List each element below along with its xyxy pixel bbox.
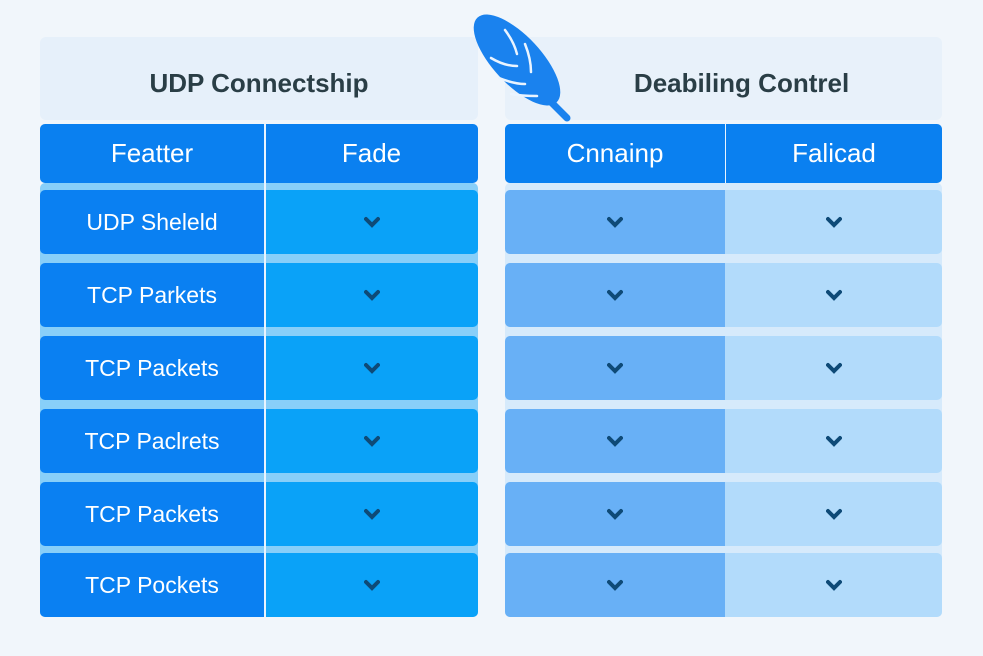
row 2 — [505, 263, 942, 327]
header row — [505, 124, 942, 183]
row 5: TCP Packets — [85, 500, 219, 526]
header row: Fade — [342, 138, 401, 168]
row 3: TCP Packets — [85, 354, 219, 380]
row 5 — [40, 482, 478, 546]
panel: right table — [505, 37, 942, 617]
title: UDP Connectship: UDP Connectship — [149, 68, 369, 98]
title: UDP Connectship — [40, 37, 478, 120]
row 2: TCP Parkets — [87, 282, 217, 308]
row 6: TCP Pockets — [85, 572, 219, 598]
divider — [264, 183, 266, 617]
row 3 — [40, 336, 478, 400]
row 4: TCP Paclrets — [84, 428, 220, 454]
row band background — [505, 183, 942, 617]
icon: feather — [474, 14, 570, 122]
title: Deabiling Contrel — [505, 37, 942, 120]
row 6 — [40, 553, 478, 617]
row 3 — [505, 336, 942, 400]
row band background — [40, 183, 478, 617]
row 1 — [505, 190, 942, 254]
panel: left table — [40, 37, 478, 617]
header row — [40, 124, 478, 183]
title: Deabiling Contrel: Deabiling Contrel — [634, 68, 849, 98]
row 2 — [40, 263, 478, 327]
header row: Featter — [111, 138, 193, 168]
row 1 — [40, 190, 478, 254]
row 1: UDP Sheleld — [86, 208, 218, 234]
row 4 — [40, 409, 478, 473]
row 6 — [505, 553, 942, 617]
header row: Cnnainp — [567, 138, 663, 168]
header row: Falicad — [792, 138, 876, 168]
row 5 — [505, 482, 942, 546]
row 4 — [505, 409, 942, 473]
